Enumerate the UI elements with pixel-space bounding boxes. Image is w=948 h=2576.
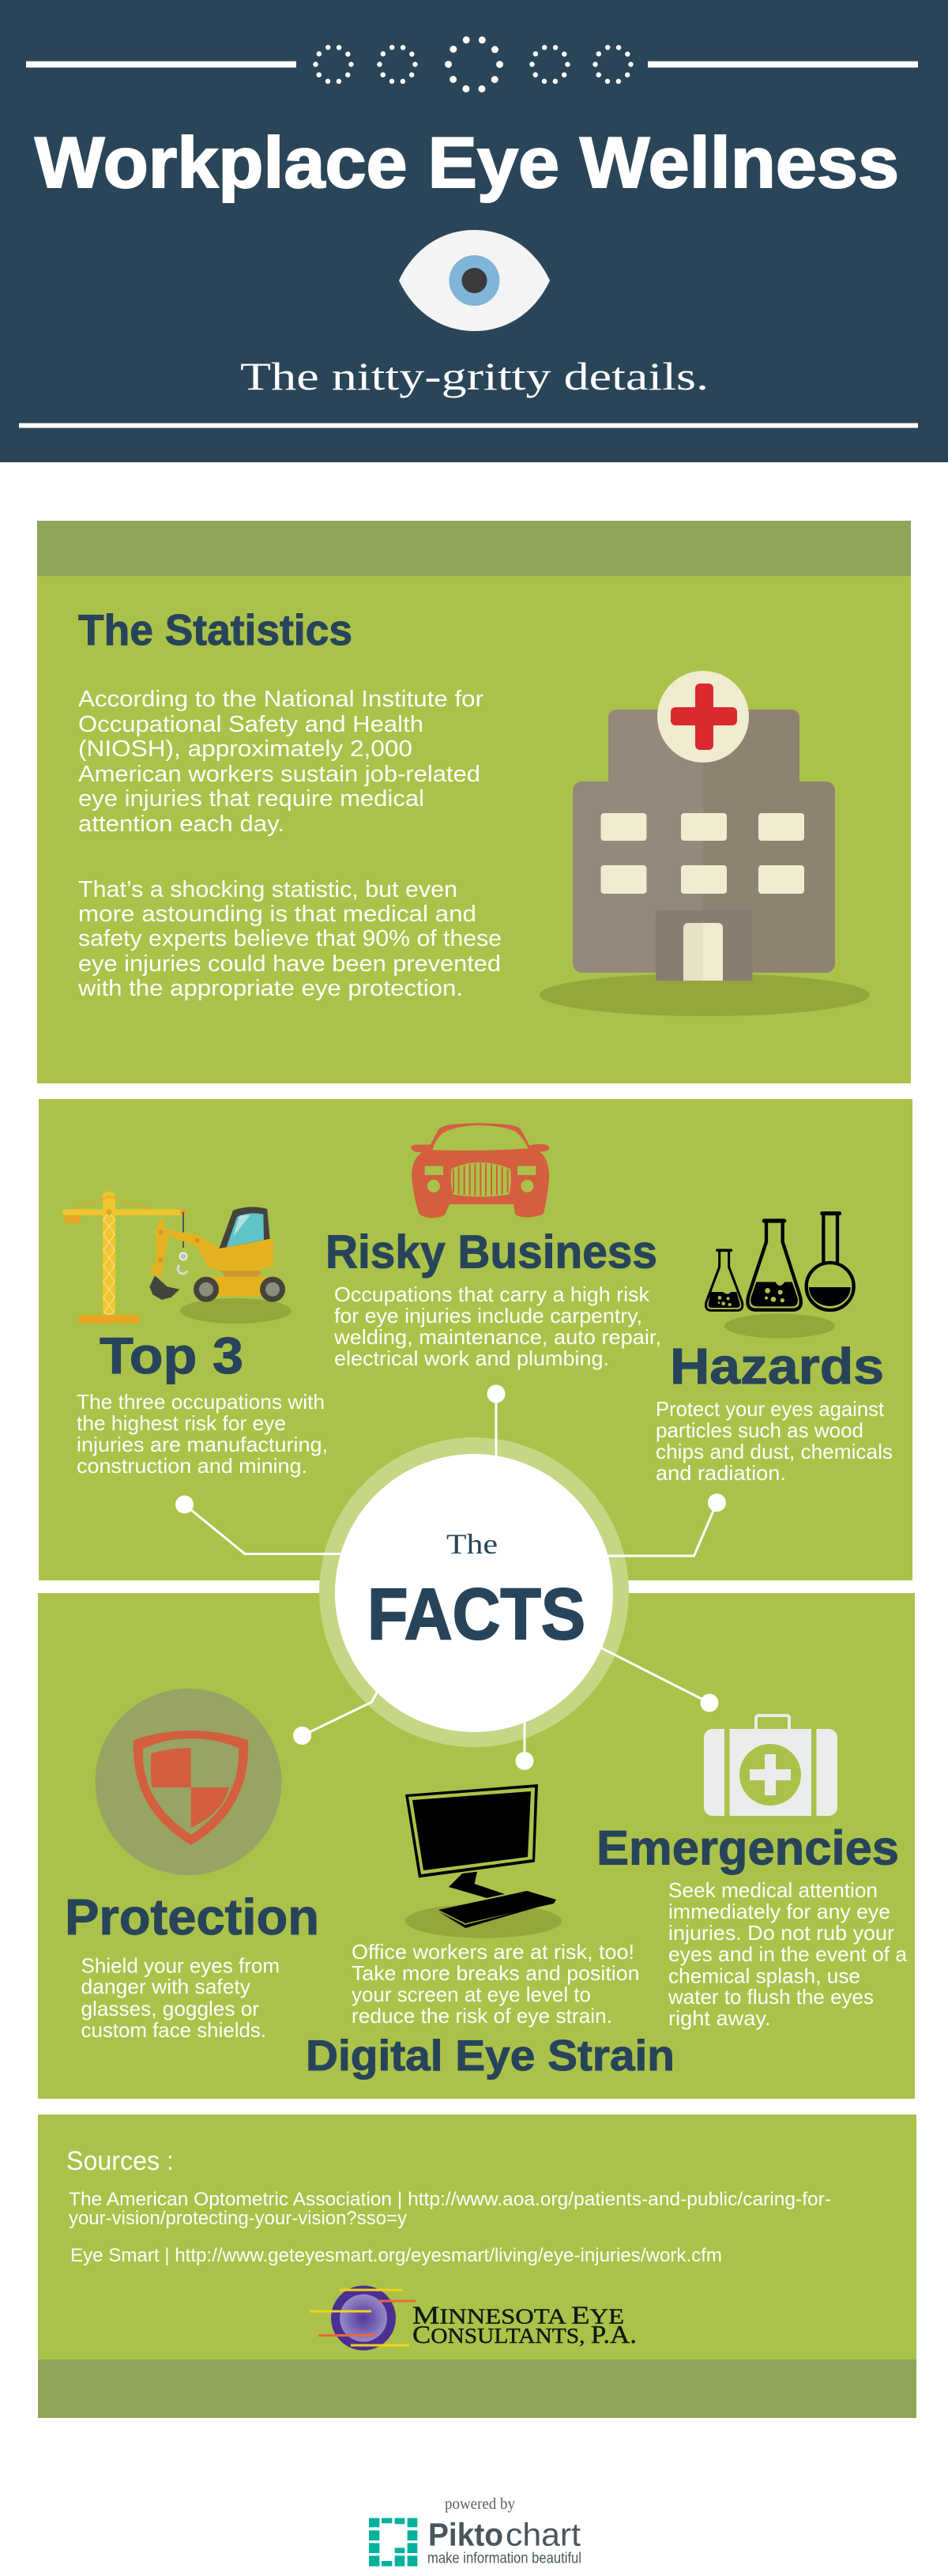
text block: hazards: and radiation. xyxy=(656,1461,786,1485)
icon: car xyxy=(411,1123,549,1218)
icon: computer monitor xyxy=(405,1784,562,1938)
icon: first aid kit xyxy=(704,1715,837,1816)
text block: digital eye strain: reduce the risk of eye strain. xyxy=(352,2004,612,2028)
text block: top 3: construction and mining. xyxy=(77,1454,307,1478)
connector lines and dots xyxy=(175,1384,726,1770)
text block: digital eye strain: Take more breaks and position xyxy=(352,1961,640,1985)
icon: piktochart logo xyxy=(369,2518,417,2567)
text block: hazards xyxy=(656,1397,893,1485)
text: facts: FACTS xyxy=(367,1574,585,1655)
text block: source links: The American Optometric Association | http://www.aoa.org/patients-and-public/caring-for- xyxy=(69,2189,831,2210)
dotted rings ornament xyxy=(316,39,630,90)
text: the: The xyxy=(446,1528,498,1560)
text block: protection: glasses, goggles or xyxy=(81,1997,259,2021)
footer: piktochart credit: chart xyxy=(506,2516,581,2552)
text block: shocking statistic paragraph: more astounding is that medical and xyxy=(78,902,476,927)
text block: digital eye strain xyxy=(352,1940,640,2028)
text block: top 3: The three occupations with xyxy=(77,1390,325,1414)
panel: sources xyxy=(38,2115,916,2418)
text block: shocking statistic paragraph: with the appropriate eye protection. xyxy=(77,976,463,1001)
text block: source links: your-vision/protecting-your-vision?sso=y xyxy=(69,2208,407,2229)
text block: shocking statistic paragraph xyxy=(77,877,502,1001)
text block: source links: Eye Smart | http://www.geteyesmart.org/eyesmart/living/eye-injuries/work.cfm xyxy=(70,2245,722,2266)
subtitle: The nitty-gritty details. xyxy=(240,354,709,398)
text block: digital eye strain: Office workers are at risk, too! xyxy=(352,1940,634,1964)
heading: protection: Protection xyxy=(65,1889,319,1945)
icon: hospital xyxy=(540,671,870,1016)
heading: emergencies: Emergencies xyxy=(596,1821,899,1874)
text: tagline: make information beautiful xyxy=(427,2550,581,2567)
text block: protection xyxy=(81,1953,280,2042)
text: powered by: powered by xyxy=(445,2495,515,2513)
panel: header xyxy=(0,0,948,462)
text block: emergencies: injuries. Do not rub your xyxy=(668,1921,894,1945)
text block: risky business: Occupations that carry a high risk xyxy=(334,1282,650,1306)
text block: shocking statistic paragraph: eye injuries could have been prevented xyxy=(78,951,501,977)
text block: protection: danger with safety xyxy=(81,1975,250,1998)
heading: the statistics: The Statistics xyxy=(78,605,352,654)
text block: source links xyxy=(69,2189,831,2266)
text block: risky business: for eye injuries include carpentry, xyxy=(334,1304,642,1328)
heading: top 3: Top 3 xyxy=(100,1327,243,1384)
text block: emergencies: right away. xyxy=(668,2006,771,2030)
text block: emergencies: eyes and in the event of a xyxy=(668,1942,908,1966)
text block: NIOSH paragraph: Occupational Safety and Health xyxy=(78,712,423,737)
text block: emergencies xyxy=(668,1878,908,2030)
text block: hazards: chips and dust, chemicals xyxy=(656,1440,893,1463)
icon: crane and excavator xyxy=(62,1192,292,1324)
text block: top 3 xyxy=(77,1390,328,1478)
title: Workplace Eye Wellness xyxy=(35,123,899,203)
heading: risky business: Risky Business xyxy=(325,1226,657,1279)
text block: NIOSH paragraph: (NIOSH), approximately 2,000 xyxy=(78,736,412,762)
text block: emergencies: chemical splash, use xyxy=(668,1964,860,1988)
footer: piktochart credit xyxy=(369,2495,581,2567)
text block: NIOSH paragraph xyxy=(78,687,483,837)
text block: top 3: injuries are manufacturing, xyxy=(77,1433,328,1456)
text block: emergencies: immediately for any eye xyxy=(668,1900,890,1923)
text block: protection: Shield your eyes from xyxy=(81,1953,280,1977)
text block: NIOSH paragraph: attention each day. xyxy=(78,812,284,837)
central ring xyxy=(319,1437,629,1747)
icon: eye xyxy=(399,230,550,331)
icon: lab flasks xyxy=(705,1214,854,1339)
text block: shocking statistic paragraph: safety experts believe that 90% of these xyxy=(78,926,502,951)
text block: risky business: welding, maintenance, auto repair, xyxy=(333,1325,661,1349)
text block: hazards: Protect your eyes against xyxy=(656,1397,885,1421)
logo: minnesota eye consultants: MINNESOTA EYE xyxy=(412,2301,624,2329)
panel: facts upper xyxy=(39,1099,912,1580)
heading: digital eye strain: Digital Eye Strain xyxy=(306,2031,675,2080)
text block: emergencies: Seek medical attention xyxy=(668,1878,878,1902)
central circle: the facts xyxy=(335,1454,613,1732)
heading: sources: Sources : xyxy=(66,2146,174,2176)
text: piktochart wordmark: Pikto xyxy=(428,2516,503,2552)
heading: hazards: Hazards xyxy=(670,1338,884,1395)
text block: NIOSH paragraph: According to the National Institute for xyxy=(78,687,483,712)
text block: top 3: the highest risk for eye xyxy=(77,1411,286,1435)
text block: risky business: electrical work and plumbing. xyxy=(334,1346,609,1370)
text block: digital eye strain: your screen at eye level to xyxy=(352,1983,591,2006)
text block: shocking statistic paragraph: That’s a shocking statistic, but even xyxy=(78,877,457,902)
panel: facts lower xyxy=(38,1593,915,2099)
icon: shield xyxy=(95,1689,281,1875)
text block: risky business xyxy=(333,1282,661,1370)
text block: hazards: particles such as wood xyxy=(656,1418,863,1442)
logo: minnesota eye consultants: CONSULTANTS, P.A. xyxy=(412,2320,637,2348)
text block: NIOSH paragraph: American workers sustain job-related xyxy=(78,762,480,787)
text block: NIOSH paragraph: eye injuries that require medical xyxy=(78,786,424,812)
panel: the statistics xyxy=(37,521,911,1083)
text block: emergencies: water to flush the eyes xyxy=(668,1985,874,2009)
logo: minnesota eye consultants xyxy=(310,2285,637,2350)
text block: protection: custom face shields. xyxy=(81,2018,266,2042)
